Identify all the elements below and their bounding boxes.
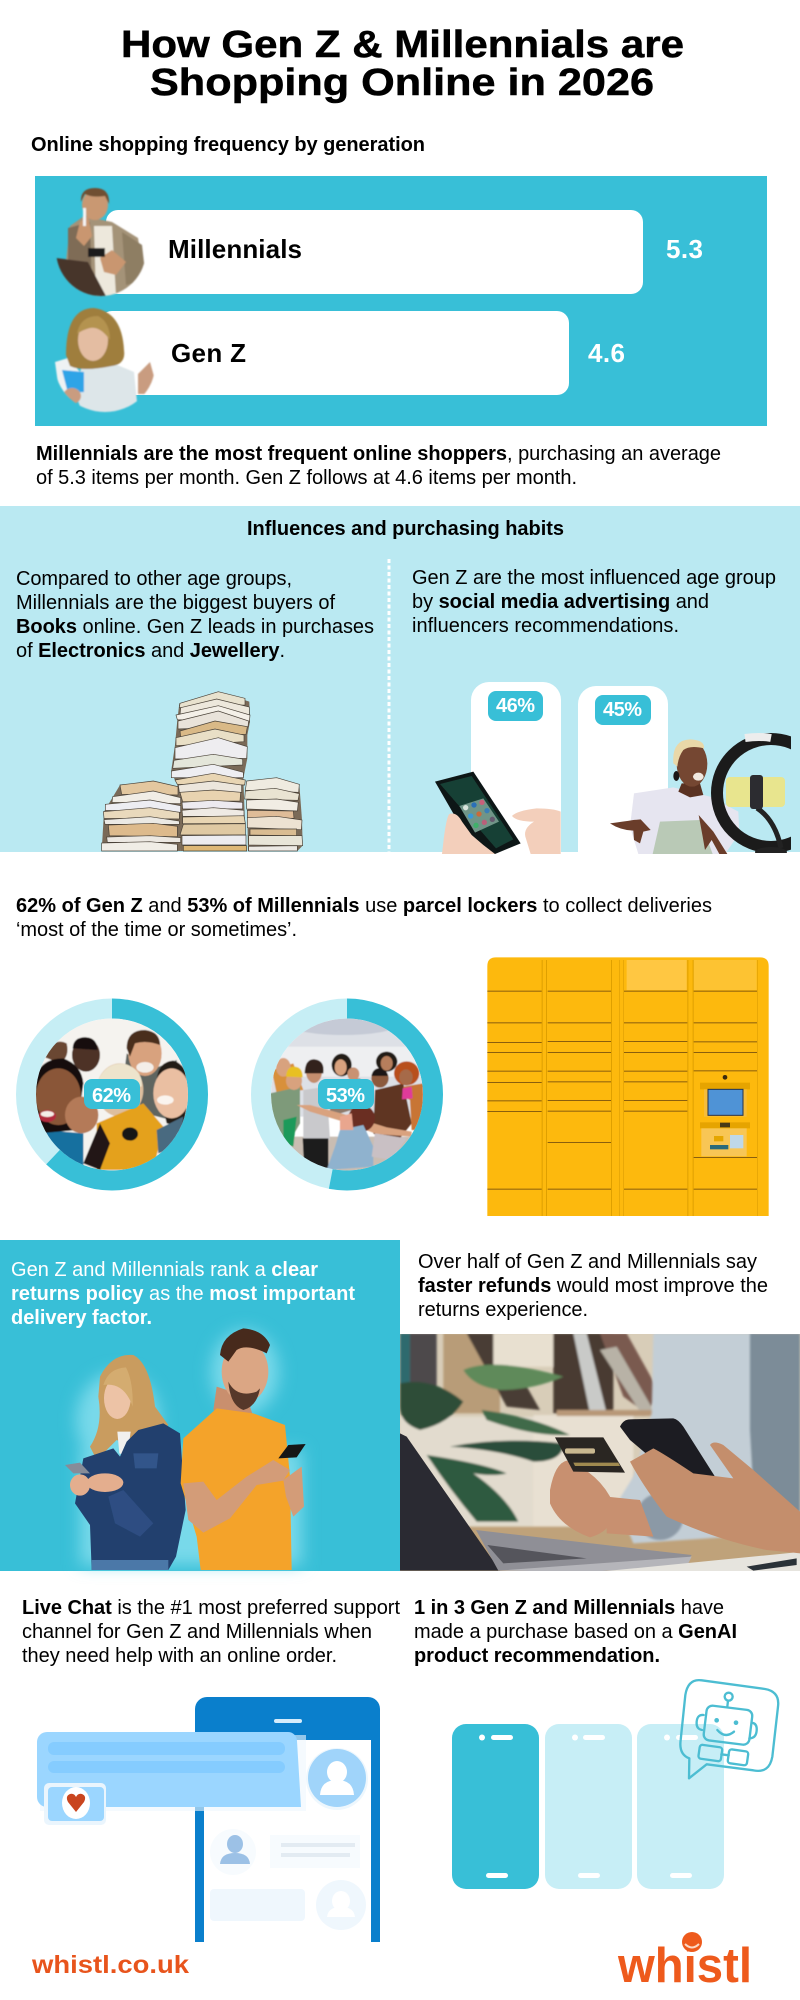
bar: Millennials: Millennials <box>168 234 302 264</box>
chart: donut 62% Gen Z <box>26 1008 198 1180</box>
title: Shopping Online in 2026 <box>150 62 654 104</box>
title <box>121 24 684 104</box>
text: books and electronics: Books online. Gen Z leads in purchases <box>16 616 374 638</box>
photo: couple using phones <box>65 1328 306 1570</box>
text: returns policy: returns policy as the most important <box>11 1283 355 1305</box>
panel: influences and purchasing habits <box>0 506 800 857</box>
text: faster refunds: Over half of Gen Z and Millennials say <box>418 1251 757 1273</box>
photo: group selfie <box>33 1017 190 1173</box>
card: 46% social media advertising <box>471 682 561 852</box>
text: parcel lockers <box>16 895 712 941</box>
icon: millennial man avatar <box>56 188 147 296</box>
badge: 62%: 62% <box>92 1085 131 1107</box>
value: 5.3: 5.3 <box>666 234 703 264</box>
panel: clear returns policy <box>0 1240 400 1571</box>
icon: Gen Z woman avatar <box>55 308 155 412</box>
text: GenAI recommendation: made a purchase based on a GenAI <box>414 1621 737 1643</box>
text: social media influence <box>412 567 776 637</box>
text: live chat: Live Chat is the #1 most preferred support <box>22 1597 400 1619</box>
text: books and electronics: Millennials are the biggest buyers of <box>16 592 335 614</box>
faded reply message <box>210 1880 366 1930</box>
illustration: hands holding smartphone <box>435 739 739 854</box>
text: GenAI recommendation <box>414 1597 737 1667</box>
chat bubble <box>37 1732 306 1811</box>
text: books and electronics <box>16 568 374 662</box>
bar: Millennials <box>106 210 643 294</box>
badge: 62% <box>84 1079 140 1109</box>
text: live chat <box>22 1597 400 1667</box>
footer: website: whistl.co.uk <box>31 1951 189 1979</box>
logo: whistl: whistl <box>617 1939 752 1993</box>
phone: pale <box>637 1724 724 1889</box>
bar: Gen Z <box>100 311 569 395</box>
card: 46% social media advertising: 46% <box>496 695 535 717</box>
icon: agent avatar <box>306 1748 368 1810</box>
phone: pale <box>545 1724 632 1889</box>
photo: hands with card, phone and laptop <box>400 1333 800 1572</box>
icon: AI robot speech bubble <box>680 1680 778 1778</box>
divider <box>388 559 390 852</box>
heading: influences: Influences and purchasing habits <box>247 518 564 540</box>
text: books and electronics: Compared to other age groups, <box>16 568 292 590</box>
text: social media influence: influencers recommendations. <box>412 615 679 637</box>
value: 4.6: 4.6 <box>588 338 625 368</box>
phone: highlighted <box>452 1724 539 1889</box>
panel: frequency bar chart <box>35 176 767 426</box>
card: 45% influencer recommendations: 45% <box>603 699 642 721</box>
text: social media influence: Gen Z are the most influenced age group <box>412 567 776 589</box>
photo: yellow parcel lockers <box>487 957 769 1216</box>
text: live chat: channel for Gen Z and Millennials when <box>22 1621 372 1643</box>
icon: heart tile <box>44 1783 106 1825</box>
heading: online shopping frequency: Online shopping frequency by generation <box>31 134 425 156</box>
badge: 53% <box>318 1079 374 1109</box>
text: parcel lockers: ‘most of the time or sometimes’. <box>16 919 297 941</box>
illustration: ring light and phone <box>717 737 800 857</box>
title: How Gen Z & Millennials are <box>121 24 684 66</box>
illustration: stacks of books <box>102 692 303 851</box>
text: GenAI recommendation: 1 in 3 Gen Z and Millennials have <box>414 1597 724 1619</box>
photo: group of friends <box>267 1017 427 1173</box>
text: returns policy <box>11 1259 355 1329</box>
text: frequency summary <box>36 443 721 489</box>
bar: Gen Z: Gen Z <box>171 338 246 368</box>
text: returns policy: Gen Z and Millennials rank a clear <box>11 1259 318 1281</box>
text: frequency summary: of 5.3 items per month. Gen Z follows at 4.6 items per month. <box>36 467 577 489</box>
card: 45% influencer recommendations <box>578 686 668 854</box>
text: social media influence: by social media advertising and <box>412 591 709 613</box>
text: live chat: they need help with an online order. <box>22 1645 337 1667</box>
text: faster refunds: faster refunds would most improve the <box>418 1275 768 1297</box>
text: returns policy: delivery factor. <box>11 1307 152 1329</box>
illustration: three phones, one highlighted <box>452 1724 724 1889</box>
text: faster refunds <box>418 1251 768 1321</box>
text: parcel lockers: 62% of Gen Z and 53% of Millennials use parcel lockers to collect deliveries <box>16 895 712 917</box>
icon: customer avatar and message <box>210 1829 360 1875</box>
text: GenAI recommendation: product recommendation. <box>414 1645 660 1667</box>
text: frequency summary: Millennials are the most frequent online shoppers, purchasing an average <box>36 443 721 465</box>
text: faster refunds: returns experience. <box>418 1299 588 1321</box>
chart: donut 53% Millennials <box>261 1008 433 1180</box>
illustration: live chat phone <box>37 1697 380 1942</box>
badge: 53%: 53% <box>326 1085 365 1107</box>
text: books and electronics: of Electronics and Jewellery. <box>16 640 285 662</box>
